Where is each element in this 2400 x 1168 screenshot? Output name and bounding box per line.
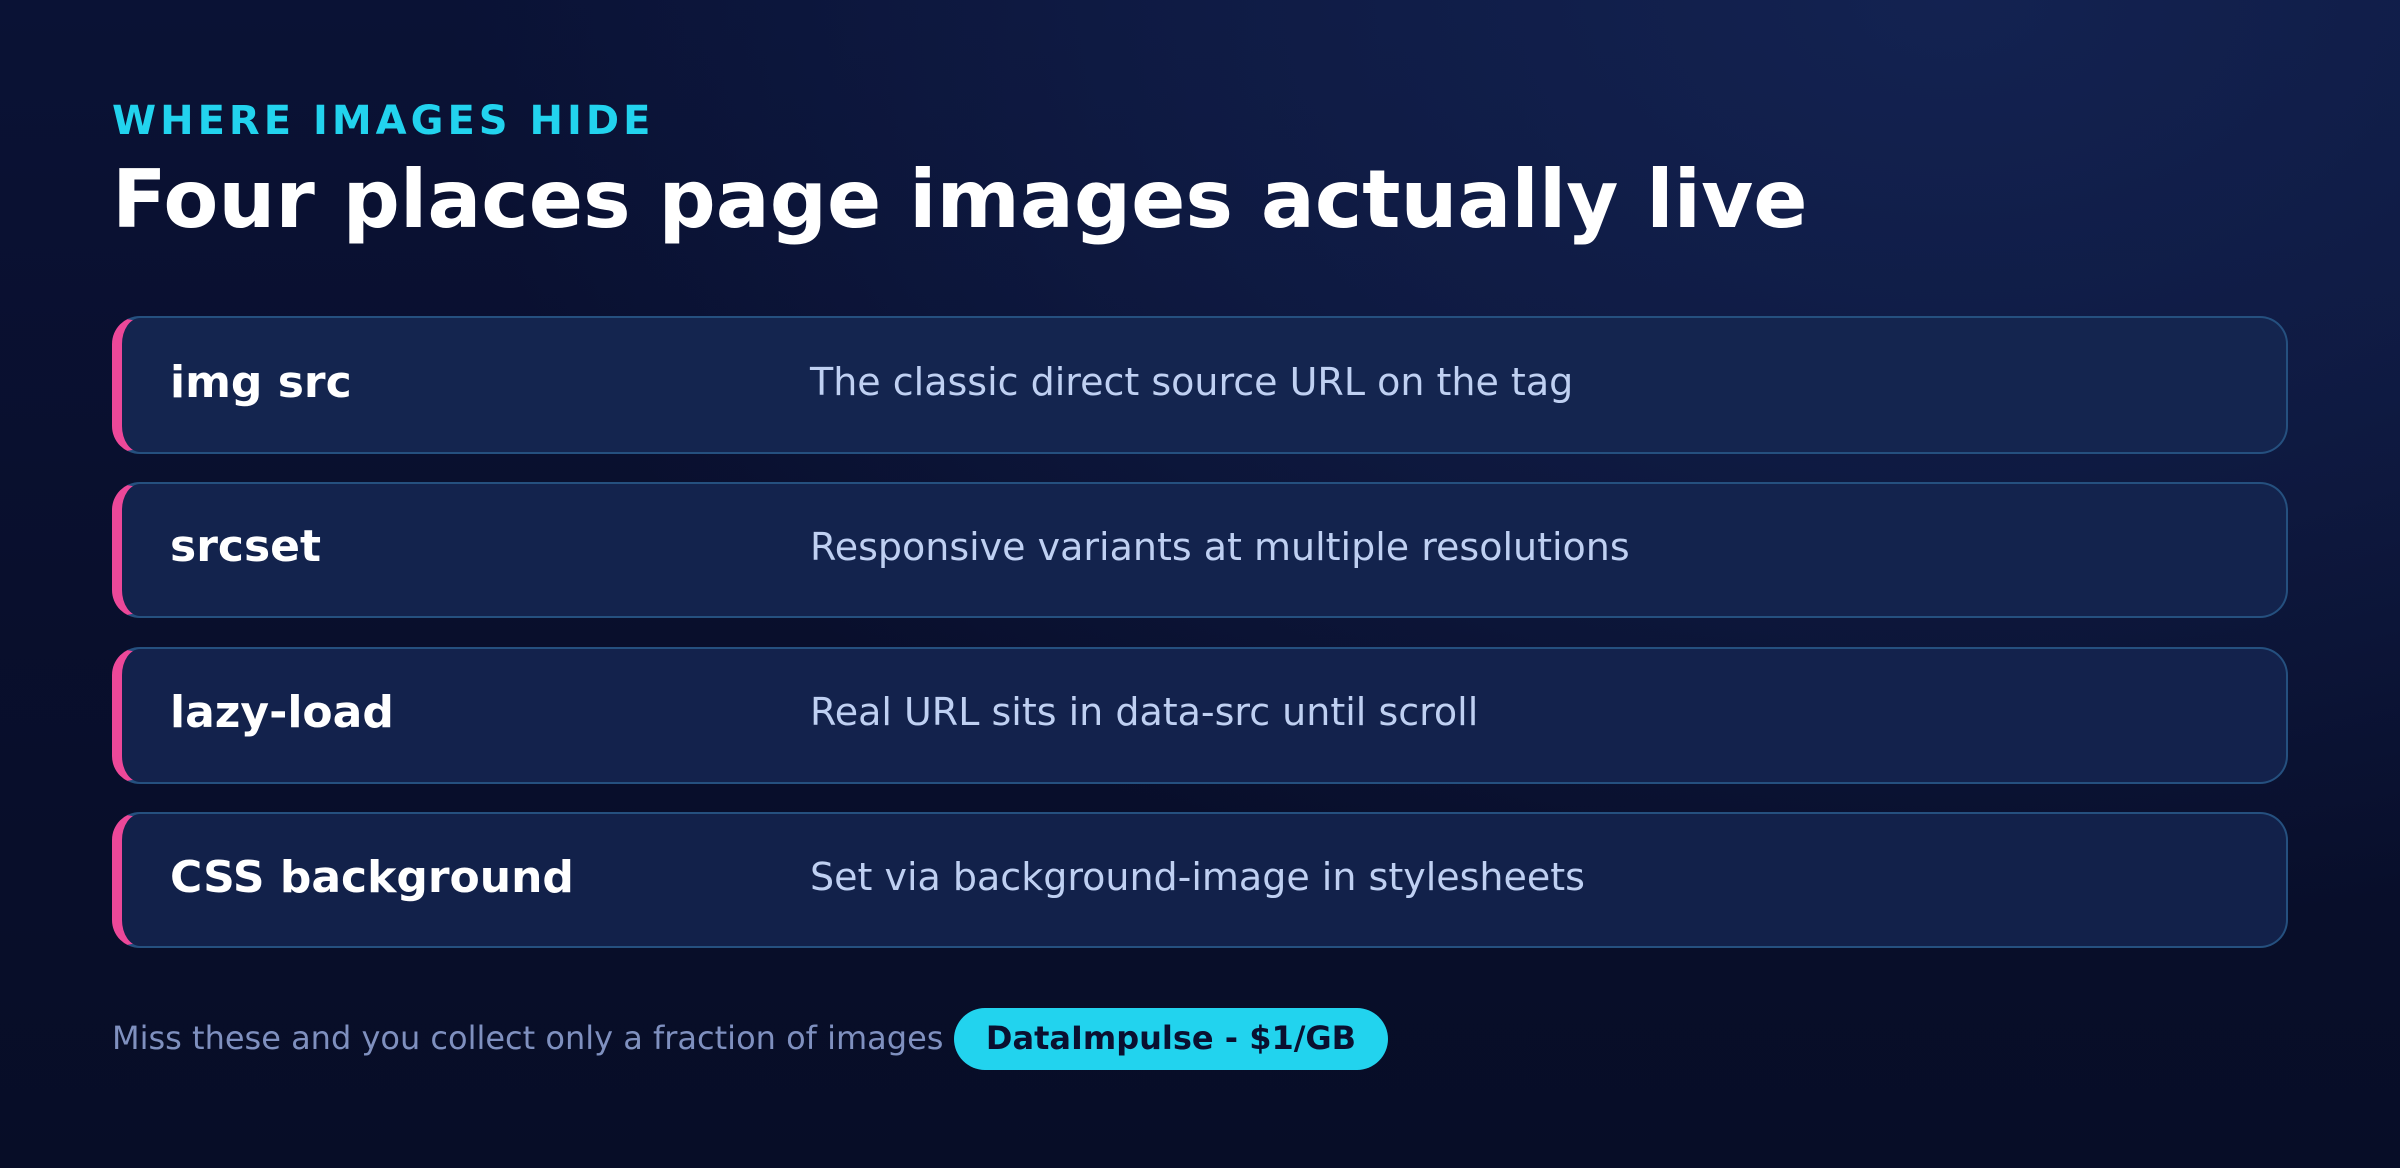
badge: DataImpulse price: DataImpulse - $1/GB (986, 1019, 1356, 1057)
card description: lazy-load: Real URL sits in data-src until scroll (810, 690, 1478, 734)
panel: srcset (112, 482, 2288, 618)
card description: srcset: Responsive variants at multiple resolutions (810, 525, 1630, 569)
panel: img src (112, 316, 2288, 454)
panel: CSS background (112, 812, 2288, 948)
eyebrow label: WHERE IMAGES HIDE (112, 98, 654, 144)
card description: CSS background: Set via background-image in stylesheets (810, 855, 1585, 899)
panel: lazy-load (112, 647, 2288, 784)
footer note: Miss these and you collect only a fraction of images (112, 1019, 943, 1057)
card name: CSS background: CSS background (170, 852, 574, 903)
badge: DataImpulse price (954, 1008, 1388, 1070)
title: Four places page images actually live (112, 153, 1808, 246)
card name: srcset: srcset (170, 521, 321, 572)
card name: img src: img src (170, 357, 352, 408)
card name: lazy-load: lazy-load (170, 687, 394, 738)
card description: img src: The classic direct source URL on the tag (810, 360, 1573, 404)
